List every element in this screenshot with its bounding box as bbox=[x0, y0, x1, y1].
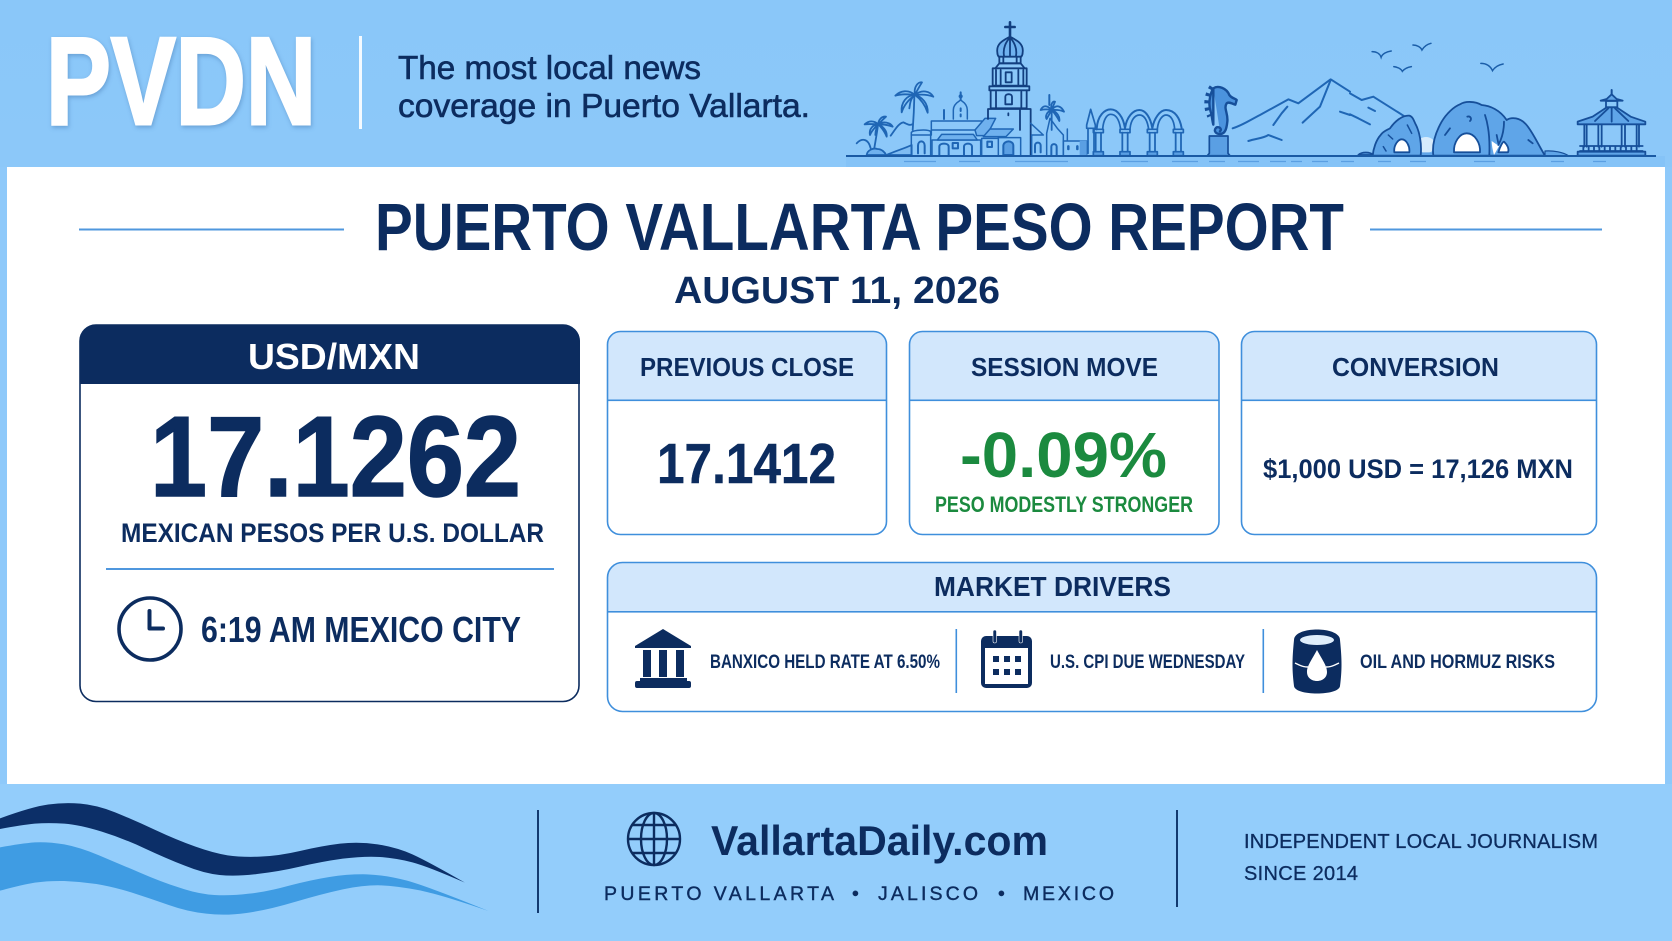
location line: PUERTO VALLARTA bbox=[604, 883, 834, 905]
skyline illustration bbox=[846, 22, 1665, 167]
card header bar bbox=[80, 325, 580, 384]
title rule left bbox=[79, 228, 344, 230]
location line: • bbox=[998, 883, 1005, 905]
heading: MARKET DRIVERS bbox=[934, 571, 1171, 602]
church body bbox=[911, 92, 1021, 156]
title block bbox=[79, 190, 1602, 312]
tagline: The most local news bbox=[398, 49, 701, 86]
label: CONVERSION bbox=[1332, 352, 1499, 382]
mountain left face bbox=[1233, 79, 1350, 141]
tagline: coverage in Puerto Vallarta. bbox=[398, 87, 810, 124]
header band bbox=[0, 0, 1672, 167]
driver: U.S. CPI: U.S. CPI DUE WEDNESDAY bbox=[1050, 652, 1245, 673]
panel: previous close bbox=[607, 332, 886, 534]
location line: • bbox=[852, 883, 859, 905]
note: PESO MODESTLY STRONGER bbox=[935, 492, 1193, 517]
driver: Banxico: BANXICO HELD RATE AT 6.50% bbox=[710, 652, 940, 673]
independent journalism note: INDEPENDENT LOCAL JOURNALISM bbox=[1244, 831, 1598, 853]
value: $1,000 USD = 17,126 MXN bbox=[1263, 454, 1573, 484]
wave: dark bbox=[0, 803, 465, 883]
title: PUERTO VALLARTA PESO REPORT bbox=[375, 190, 1344, 265]
title rule right bbox=[1370, 228, 1602, 230]
tagline bbox=[398, 49, 810, 124]
independent journalism note bbox=[1244, 831, 1598, 885]
value: 17.1412 bbox=[657, 432, 836, 496]
main rate: 17.1262 bbox=[150, 394, 521, 521]
label: SESSION MOVE bbox=[971, 352, 1158, 382]
location line: MEXICO bbox=[1023, 883, 1114, 905]
rock arch left bbox=[1358, 116, 1421, 156]
gazebo bbox=[1578, 90, 1645, 156]
independent journalism note: SINCE 2014 bbox=[1244, 863, 1358, 885]
card header label: USD/MXN bbox=[248, 336, 420, 377]
malecon arches, seahorse and mountain bbox=[1080, 79, 1350, 156]
location line: JALISCO bbox=[878, 883, 978, 905]
card outline bbox=[80, 325, 579, 702]
rate caption: MEXICAN PESOS PER U.S. DOLLAR bbox=[121, 518, 544, 548]
footer divider right bbox=[1176, 810, 1178, 907]
logo: PVDN: PVDN bbox=[46, 13, 316, 151]
panel: USD/MXN rate card bbox=[80, 325, 580, 702]
water strip bbox=[846, 156, 1665, 167]
panel: session move bbox=[910, 332, 1219, 534]
footer divider left bbox=[537, 810, 539, 913]
label: PREVIOUS CLOSE bbox=[640, 352, 854, 382]
big palm bbox=[895, 82, 933, 130]
value: -0.09% bbox=[960, 419, 1167, 491]
panel: market drivers bbox=[607, 562, 1596, 712]
malecon arches bbox=[1080, 109, 1183, 156]
rock arch right bbox=[1433, 102, 1545, 156]
footer band bbox=[0, 784, 1672, 941]
panel: conversion bbox=[1241, 332, 1596, 534]
icon: oil barrel bbox=[1292, 630, 1342, 694]
seahorse sculpture bbox=[1207, 87, 1237, 156]
icon: calendar bbox=[981, 630, 1032, 688]
icon: bank bbox=[635, 629, 691, 688]
location line bbox=[604, 883, 1114, 905]
church tower bbox=[988, 22, 1031, 156]
shoreline bbox=[846, 155, 1656, 157]
icon: clock bbox=[119, 598, 181, 660]
small palm bbox=[857, 117, 912, 155]
header divider bbox=[359, 36, 362, 129]
mountain right face bbox=[1350, 93, 1405, 124]
wave: light blue bbox=[0, 842, 488, 915]
church and palms bbox=[857, 22, 1087, 156]
date: AUGUST 11, 2026 bbox=[674, 270, 1000, 312]
right-hand chapel and palm bbox=[1031, 95, 1087, 156]
main white panel bbox=[7, 167, 1665, 784]
card rule bbox=[106, 568, 554, 570]
icon: globe bbox=[628, 813, 680, 865]
rocks and gazebo bbox=[1350, 90, 1645, 156]
sunlit gap bbox=[1417, 137, 1435, 153]
driver: oil and Hormuz: OIL AND HORMUZ RISKS bbox=[1360, 652, 1555, 673]
website: VallartaDaily.com bbox=[711, 817, 1048, 864]
birds bbox=[1372, 43, 1503, 71]
timestamp: 6:19 AM MEXICO CITY bbox=[201, 609, 521, 650]
